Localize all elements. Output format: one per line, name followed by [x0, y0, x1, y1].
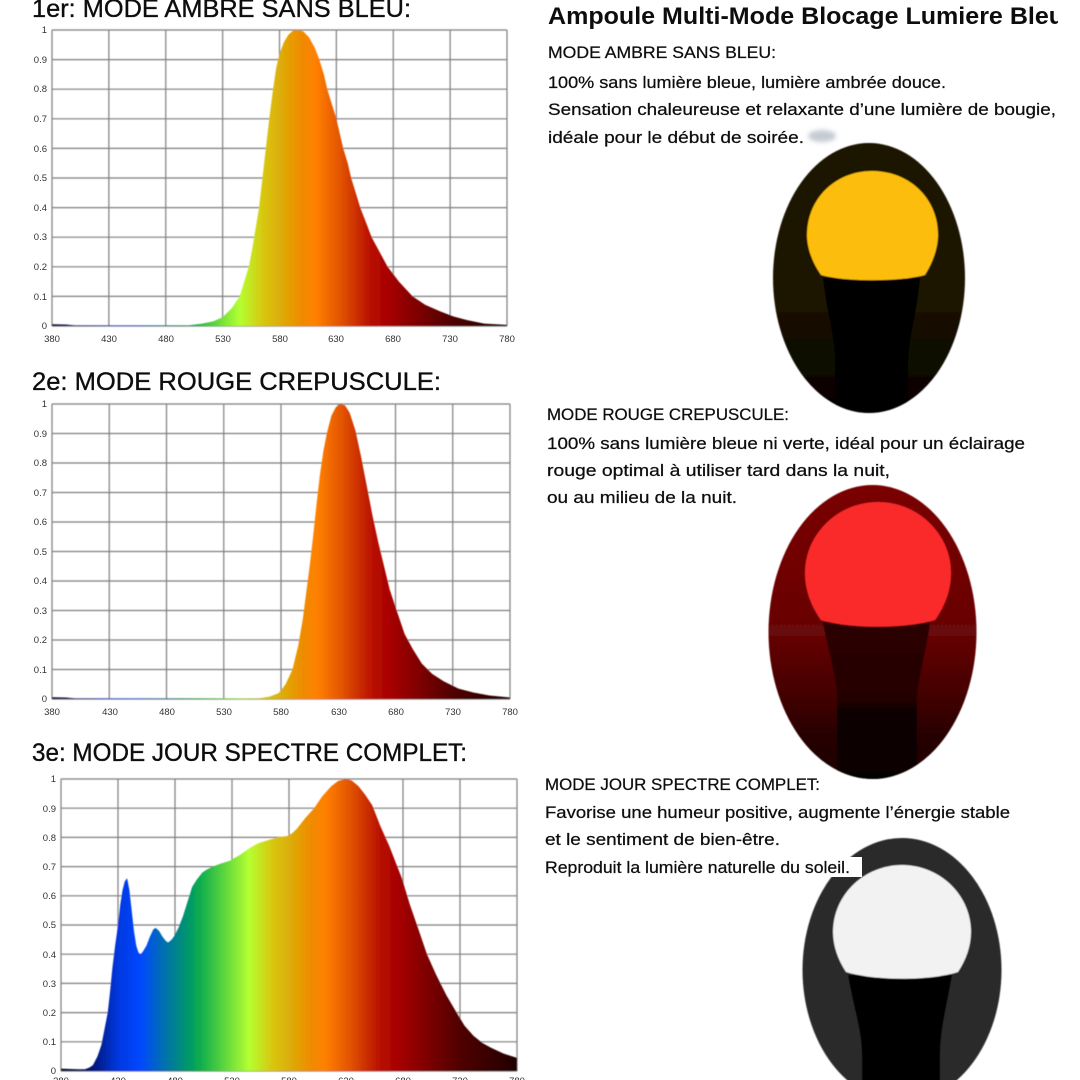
x axis labels chart 2: 480: [159, 707, 175, 718]
y axis labels chart 2: 0.5: [34, 547, 47, 558]
y axis labels chart 3: 0: [51, 1066, 56, 1077]
y axis labels chart 3: 0.4: [43, 950, 56, 961]
text block: jour: MODE JOUR SPECTRE COMPLET:: [545, 776, 820, 794]
text block: rouge: ou au milieu de la nuit.: [547, 489, 737, 507]
spectrum curve: [61, 779, 517, 1071]
text block: rouge: [547, 406, 1025, 507]
y axis labels chart 2: 0.2: [34, 635, 47, 646]
text block: jour: et le sentiment de bien-être.: [545, 831, 780, 849]
blurred emoji smudge: [808, 130, 836, 142]
x axis labels chart 1: 730: [442, 334, 458, 345]
y axis labels chart 3: 0.8: [43, 833, 56, 844]
y axis labels chart 3: 0.2: [43, 1008, 56, 1019]
chart: spectre mode ambre: [52, 30, 507, 326]
text block: ambre: MODE AMBRE SANS BLEU:: [548, 44, 776, 62]
x axis labels chart 1: 530: [215, 334, 231, 345]
y axis labels chart 3: 0.7: [43, 862, 56, 873]
y axis labels chart 1: 0: [42, 321, 47, 332]
grid: [61, 779, 517, 1071]
text block: ambre: [548, 44, 1056, 147]
icon: ampoule ambre: [773, 143, 965, 420]
y axis labels chart 3: 0.1: [43, 1037, 56, 1048]
x axis labels chart 1: 580: [272, 334, 288, 345]
x axis labels chart 2: [44, 707, 518, 718]
heading: mode rouge: 2e: MODE ROUGE CREPUSCULE:: [32, 368, 441, 396]
y axis labels chart 1: 0.7: [34, 114, 47, 125]
x axis labels chart 1: 380: [44, 334, 60, 345]
x axis labels chart 3: [53, 1076, 525, 1080]
y axis labels chart 3: 0.6: [43, 891, 56, 902]
y axis labels chart 2: 0: [42, 694, 47, 705]
y axis labels chart 2: 0.8: [34, 458, 47, 469]
y axis labels chart 1: 0.9: [34, 55, 47, 66]
y axis labels chart 2: 0.7: [34, 488, 47, 499]
text block: rouge: 100% sans lumière bleue ni verte, idéal pour un éclairage: [547, 435, 1025, 453]
x axis labels chart 2: 680: [388, 707, 404, 718]
icon: ampoule rouge: [768, 485, 976, 785]
x axis labels chart 2: 430: [102, 707, 118, 718]
text block: jour: [545, 776, 1010, 849]
heading: mode jour: 3e: MODE JOUR SPECTRE COMPLET:: [32, 739, 467, 767]
chart: spectre mode rouge: [52, 404, 510, 699]
x axis labels chart 1: 680: [385, 334, 401, 345]
x axis labels chart 1: 630: [328, 334, 344, 345]
text line: soleil: Reproduit la lumière naturelle du soleil.: [545, 859, 850, 877]
y axis labels chart 2: [34, 399, 47, 705]
text block: rouge: rouge optimal à utiliser tard dans la nuit,: [547, 462, 890, 480]
y axis labels chart 3: 0.5: [43, 920, 56, 931]
y axis labels chart 3: 1: [51, 774, 56, 785]
y axis labels chart 3: 0.9: [43, 804, 56, 815]
text block: ambre: idéale pour le début de soirée.: [548, 129, 804, 147]
y axis labels chart 2: 1: [42, 399, 47, 410]
text block: ambre: 100% sans lumière bleue, lumière ambrée douce.: [548, 74, 946, 92]
y axis labels chart 1: 0.5: [34, 173, 47, 184]
chart: spectre mode jour: [61, 779, 517, 1071]
title right column: Ampoule Multi-Mode Blocage Lumiere Bleue: [548, 3, 1078, 30]
y axis labels chart 1: 0.1: [34, 292, 47, 303]
x axis labels chart 2: 630: [331, 707, 347, 718]
y axis labels chart 1: 0.8: [34, 84, 47, 95]
right edge mask: [1058, 0, 1080, 40]
x axis labels chart 1: 430: [101, 334, 117, 345]
text block: jour: Favorise une humeur positive, augmente l’énergie stable: [545, 804, 1010, 822]
white box behind text end: [780, 857, 862, 877]
spectrum curve: [52, 404, 510, 699]
y axis labels chart 2: 0.3: [34, 606, 47, 617]
x axis labels chart 2: 780: [502, 707, 518, 718]
x axis labels chart 2: 530: [216, 707, 232, 718]
spectrum curve: [52, 30, 507, 326]
y axis labels chart 1: [34, 25, 47, 332]
text block: ambre: Sensation chaleureuse et relaxante d’une lumière de bougie,: [548, 101, 1056, 119]
grid: [52, 30, 507, 326]
x axis labels chart 1: 780: [499, 334, 515, 345]
y axis labels chart 1: 1: [42, 25, 47, 36]
x axis labels chart 1: [44, 334, 515, 345]
icon: ampoule blanche: [802, 838, 1002, 1080]
x axis labels chart 2: 580: [273, 707, 289, 718]
x axis labels chart 2: 380: [44, 707, 60, 718]
y axis labels chart 2: 0.6: [34, 517, 47, 528]
y axis labels chart 3: [43, 774, 56, 1077]
y axis labels chart 1: 0.6: [34, 144, 47, 155]
y axis labels chart 1: 0.4: [34, 203, 47, 214]
y axis labels chart 2: 0.4: [34, 576, 47, 587]
x axis labels chart 2: 730: [445, 707, 461, 718]
y axis labels chart 2: 0.1: [34, 665, 47, 676]
x axis labels chart 1: 480: [158, 334, 174, 345]
y axis labels chart 1: 0.3: [34, 232, 47, 243]
y axis labels chart 1: 0.2: [34, 262, 47, 273]
y axis labels chart 2: 0.9: [34, 429, 47, 440]
text block: rouge: MODE ROUGE CREPUSCULE:: [547, 406, 789, 424]
y axis labels chart 3: 0.3: [43, 979, 56, 990]
grid: [52, 404, 510, 699]
